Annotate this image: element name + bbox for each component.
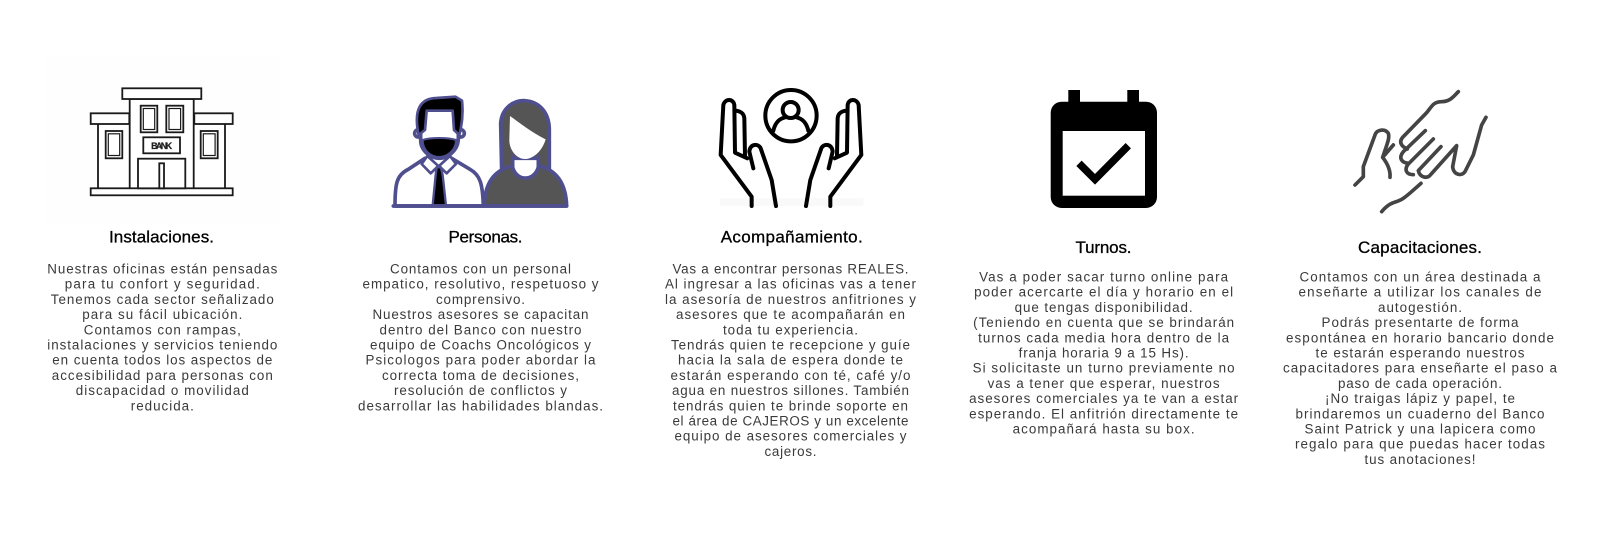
text block: Turnos: vas a tener que esperar, nuestros xyxy=(988,376,1220,391)
text block: Acompañamiento: Vas a encontrar personas REALES. xyxy=(672,262,908,276)
text block: Turnos xyxy=(969,270,1239,436)
text block: Instalaciones: para tu confort y seguridad. xyxy=(65,277,260,292)
text block: Turnos: que tengas disponibilidad. xyxy=(1015,300,1193,315)
text block: Personas: resolución de conflictos y xyxy=(394,383,567,398)
icon: calendar with check xyxy=(1051,90,1157,208)
heading: Acompañamiento: Acompañamiento. xyxy=(721,228,863,247)
text block: Acompañamiento: asesores que te acompañarán en xyxy=(676,307,905,322)
text block: Turnos: Vas a poder sacar turno online para xyxy=(979,270,1229,284)
text block: Capacitaciones: paso de cada operación. xyxy=(1338,376,1502,391)
icon: hands holding person xyxy=(720,90,863,206)
text block: Instalaciones: reducida. xyxy=(131,398,194,413)
text block: Personas: Psicologos para poder abordar la xyxy=(366,353,596,368)
panel: Capacitaciones xyxy=(1283,92,1558,467)
text block: Turnos: franja horaria 9 a 15 Hs). xyxy=(1019,346,1189,360)
text block: Acompañamiento: hacia la sala de espera donde te xyxy=(678,353,903,368)
text block: Turnos: (Teniendo en cuenta que se brindarán xyxy=(973,315,1234,330)
text block: Personas: desarrollar las habilidades blandas. xyxy=(358,398,603,413)
text block: Instalaciones: en cuenta todos los aspectos de xyxy=(52,353,272,368)
text block: Acompañamiento: el área de CAJEROS y un excelente xyxy=(672,414,908,428)
icon: man and woman xyxy=(393,97,567,206)
text block: Instalaciones: discapacidad o movilidad xyxy=(76,383,249,398)
text block: Capacitaciones: tus anotaciones! xyxy=(1364,452,1476,467)
text block: Personas: equipo de Coachs Oncológicos y xyxy=(370,338,591,352)
text block: Personas: Contamos con un personal xyxy=(390,262,571,276)
text block: Acompañamiento: estarán esperando con té, café y/o xyxy=(670,368,910,383)
text block: Capacitaciones: Podrás presentarte de forma xyxy=(1322,315,1519,330)
text block: Capacitaciones: regalo para que puedas hacer todas xyxy=(1295,437,1545,452)
text block: Capacitaciones: te estarán esperando nuestros xyxy=(1316,346,1525,360)
text block: Instalaciones: Contamos con rampas, xyxy=(84,322,241,337)
text block: Capacitaciones: capacitadores para enseñarte el paso a xyxy=(1283,361,1558,376)
text block: Capacitaciones: espontánea en horario bancario donde xyxy=(1286,330,1554,345)
text block: Personas: Nuestros asesores se capacitan xyxy=(372,307,588,322)
icon: helping hands xyxy=(1355,92,1486,212)
text block: Capacitaciones: autogestión. xyxy=(1378,300,1462,315)
text block: Capacitaciones: enseñarte a utilizar los canales de xyxy=(1298,285,1542,300)
text block: Capacitaciones: brindaremos un cuaderno del Banco xyxy=(1296,406,1544,421)
icon: bank building: BANK xyxy=(151,141,173,151)
text block: Acompañamiento: toda tu experiencia. xyxy=(723,322,858,337)
heading: Capacitaciones: Capacitaciones. xyxy=(1358,238,1482,257)
text block: Acompañamiento: tendrás quien te brinde soporte en xyxy=(673,398,908,413)
text block: Capacitaciones: Saint Patrick y una lapicera como xyxy=(1304,422,1536,436)
heading: Turnos: Turnos. xyxy=(1076,238,1132,257)
text block: Instalaciones: para su fácil ubicación. xyxy=(82,307,242,322)
text block: Turnos: poder acercarte el día y horario en el xyxy=(974,285,1233,300)
panel: Acompañamiento xyxy=(665,90,917,459)
text block: Instalaciones xyxy=(47,262,278,413)
text block: Acompañamiento: agua en nuestros sillones. También xyxy=(672,383,909,398)
panel: Personas xyxy=(358,97,603,413)
icon: bank building xyxy=(46,55,280,223)
text block: Capacitaciones: Contamos con un área destinada a xyxy=(1300,270,1541,284)
panel: Instalaciones xyxy=(46,55,280,413)
text block: Acompañamiento: equipo de asesores comerciales y xyxy=(674,429,907,444)
panel: Turnos xyxy=(969,90,1239,436)
text block: Acompañamiento: Al ingresar a las oficinas vas a tener xyxy=(665,277,917,292)
heading: Personas: Personas. xyxy=(448,228,522,247)
text block: Acompañamiento: cajeros. xyxy=(764,444,816,459)
text block: Acompañamiento: la asesoría de nuestros anfitriones y xyxy=(665,292,916,307)
text block: Turnos: acompañará hasta su box. xyxy=(1013,422,1195,436)
heading: Instalaciones: Instalaciones. xyxy=(109,228,214,247)
text block: Acompañamiento: Tendrás quien te recepcione y guíe xyxy=(671,338,910,352)
text block: Acompañamiento xyxy=(665,262,917,459)
text block: Turnos: esperando. El anfitrión directamente te xyxy=(969,406,1238,421)
text block: Personas: comprensivo. xyxy=(436,292,525,307)
text block: Instalaciones: accesibilidad para personas con xyxy=(52,368,273,383)
text block: Capacitaciones xyxy=(1283,270,1558,467)
text block: Turnos: asesores comerciales ya te van a estar xyxy=(969,391,1239,406)
text block: Personas: dentro del Banco con nuestro xyxy=(380,322,582,337)
text block: Instalaciones: instalaciones y servicios teniendo xyxy=(47,338,277,352)
text block: Turnos: turnos cada media hora dentro de la xyxy=(978,330,1230,345)
text block: Personas xyxy=(358,262,603,413)
text block: Personas: empatico, resolutivo, respetuoso y xyxy=(362,277,599,292)
text block: Personas: correcta toma de decisiones, xyxy=(382,368,579,383)
text block: Turnos: Si solicitaste un turno previamente no xyxy=(973,361,1235,376)
text block: Capacitaciones: ¡No traigas lápiz y papel, te xyxy=(1325,391,1515,406)
text block: Instalaciones: Tenemos cada sector señalizado xyxy=(51,292,274,307)
text block: Instalaciones: Nuestras oficinas están pensadas xyxy=(47,262,278,276)
